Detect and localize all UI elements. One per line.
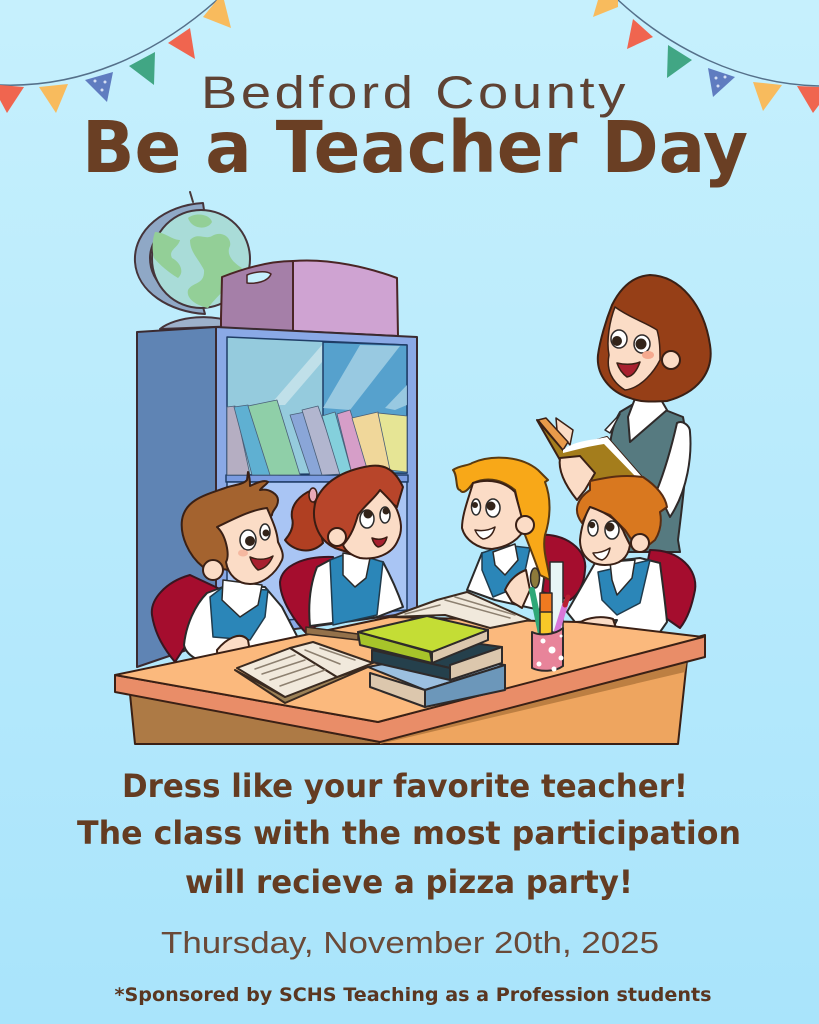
figure: boy right [567, 476, 667, 632]
heading: Be a Teacher Day: Be a Teacher Day [82, 106, 748, 189]
open book left [235, 642, 373, 703]
stacked books [358, 616, 505, 707]
chairs [152, 535, 695, 662]
bookcase [137, 327, 417, 667]
figure: blonde girl [453, 458, 550, 610]
pencil on table [306, 627, 358, 640]
heading: Bedford County: Bedford County [201, 67, 629, 118]
pencil cup [530, 562, 568, 672]
open book right [390, 592, 530, 628]
icon: purple box [220, 260, 398, 336]
figure: girl with ponytail [285, 466, 403, 626]
text: dress like your favorite teacher: Dress like your favorite teacher! [122, 767, 688, 805]
text: class with most participation: The class with the most participation [77, 814, 741, 852]
bunting: top right [593, 0, 819, 113]
books in bookcase [227, 400, 407, 475]
text: sponsor: *Sponsored by SCHS Teaching as a Profession students [114, 984, 712, 1006]
table [115, 617, 705, 744]
text: date: Thursday, November 20th, 2025 [161, 925, 659, 960]
illustration: classroom [115, 192, 711, 744]
icon: globe [135, 192, 250, 329]
text: pizza party: will recieve a pizza party! [185, 863, 633, 901]
figure: boy left [182, 472, 298, 675]
figure: teacher [537, 275, 711, 552]
bunting: top left [0, 0, 231, 113]
